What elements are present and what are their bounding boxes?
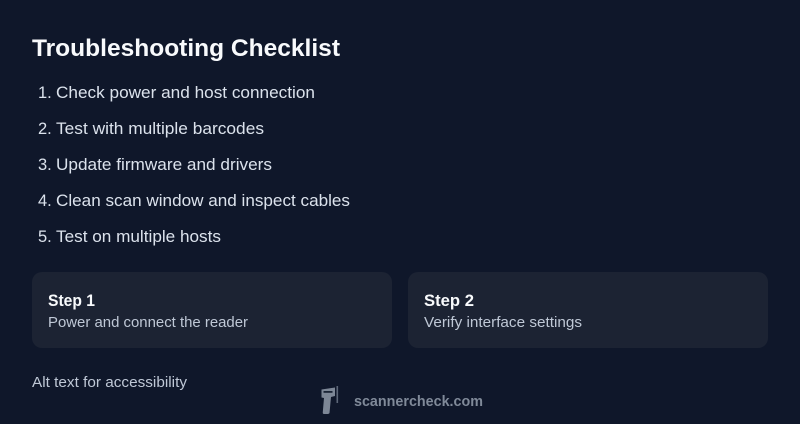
item 5: Test on multiple hosts bbox=[56, 228, 221, 246]
item 5: 5. bbox=[38, 228, 52, 246]
item 1: Check power and host connection bbox=[56, 84, 315, 102]
item 3: Update firmware and drivers bbox=[56, 156, 272, 174]
item 2: Test with multiple barcodes bbox=[56, 120, 264, 138]
step 2 heading: Step 2 bbox=[424, 292, 474, 310]
item 1: 1. bbox=[38, 84, 52, 102]
panel: step 2 bbox=[408, 272, 768, 348]
item 2: 2. bbox=[38, 120, 52, 138]
item 4: Clean scan window and inspect cables bbox=[56, 192, 350, 210]
alt text caption: Alt text for accessibility bbox=[32, 375, 188, 391]
panel: step 1 bbox=[32, 272, 392, 348]
step 1 description: Power and connect the reader bbox=[48, 315, 248, 331]
item 4: 4. bbox=[38, 192, 52, 210]
step 2 description: Verify interface settings bbox=[424, 315, 582, 331]
step 1 heading: Step 1 bbox=[48, 292, 95, 310]
icon: barcode scanner bbox=[322, 386, 338, 414]
title: Troubleshooting Checklist bbox=[32, 35, 340, 62]
watermark text: scannercheck.com bbox=[354, 394, 483, 410]
checklist bbox=[38, 84, 350, 246]
watermark bbox=[322, 386, 483, 414]
item 3: 3. bbox=[38, 156, 52, 174]
